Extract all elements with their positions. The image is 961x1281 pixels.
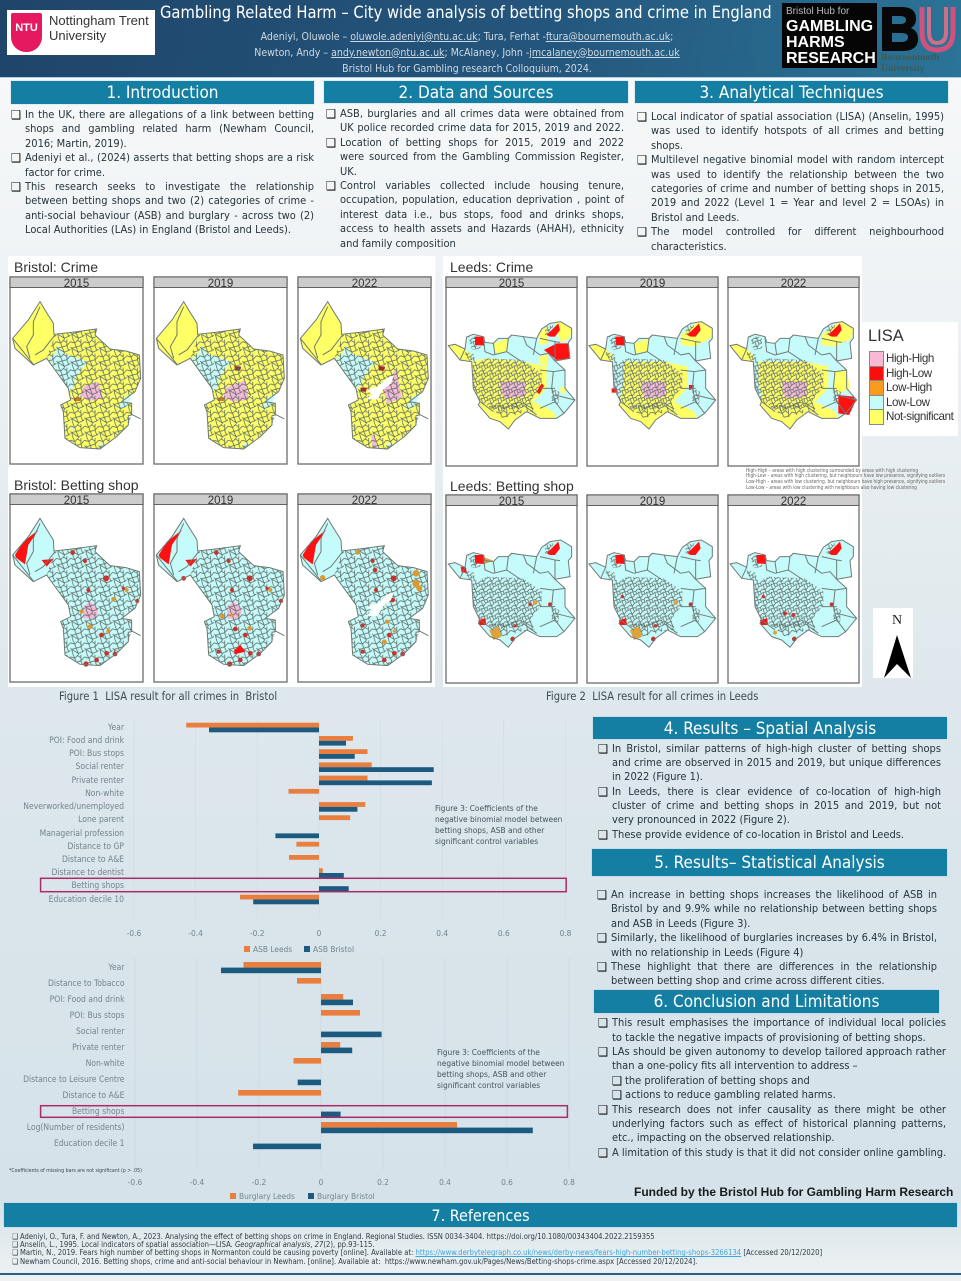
y labels: Neverworked/unemployed bbox=[23, 802, 124, 812]
legend note: LISA definitions: High-High – areas with high clustering surrounded by areas with high clustering bbox=[746, 468, 918, 474]
legend note: LISA definitions: Low-Low – areas with low clustering with neighbours also having low clustering bbox=[746, 486, 917, 491]
y labels: POI: Food and drink bbox=[49, 736, 125, 746]
y labels: Year bbox=[107, 963, 125, 973]
text: conclusion and limitations: actions to reduce gambling related harms. bbox=[625, 1088, 836, 1101]
map: Leeds crime 2015: 2015 bbox=[499, 278, 524, 290]
text: introduction bbox=[12, 108, 314, 236]
text: data and sources: occupation, population, education deprivation , point of bbox=[340, 193, 624, 206]
heading: 1. Introduction bbox=[11, 81, 314, 104]
logo: Bristol Hub for Gambling Harms Research: HARMS bbox=[786, 34, 845, 51]
text: conclusion and limitations: LAs should be given autonomy to develop tailored approach rather bbox=[612, 1045, 946, 1058]
text: references bbox=[12, 1232, 822, 1266]
bars: Burglary Bristol bbox=[221, 968, 533, 1149]
logo: Bristol Hub for Gambling Harms Research bbox=[782, 3, 877, 68]
y labels: Social renter bbox=[76, 762, 125, 772]
chart caption: Figure 3: Coefficients of the bbox=[437, 1047, 540, 1057]
heading: 7. References bbox=[4, 1203, 957, 1227]
x axis: -0.4 bbox=[190, 1177, 205, 1187]
map: Leeds crime 2022: 2022 bbox=[781, 278, 806, 290]
footer rule bbox=[0, 1273, 961, 1275]
x axis: 0.8 bbox=[563, 1177, 575, 1187]
text: spatial analysis: very pronounced in 2022 (Figure 2). bbox=[612, 813, 790, 826]
heading: 7. References: 7. References bbox=[431, 1206, 530, 1225]
text: spatial analysis: In Bristol, similar patterns of high-high cluster of betting shops bbox=[612, 742, 941, 754]
funding note: Funded by the Bristol Hub for Gambling Harm Research bbox=[634, 1185, 953, 1199]
y labels: POI: Food and drink bbox=[50, 995, 125, 1005]
text: introduction: factor for crime. bbox=[25, 166, 105, 179]
heading: 4. Results Spatial Analysis bbox=[593, 717, 947, 739]
y labels: Managerial profession bbox=[40, 829, 124, 839]
x axis: 0 bbox=[319, 1177, 324, 1187]
text: data and sources: were sourced from the Gambling Commission Register, bbox=[340, 150, 624, 163]
heading: 6. Conclusion and Limitations bbox=[594, 990, 939, 1013]
title: Gambling Related Harm – City wide analysis of betting shops and crime in England bbox=[160, 3, 772, 22]
x axis: -0.2 bbox=[250, 928, 264, 938]
x axis: -0.2 bbox=[252, 1177, 266, 1187]
map: Bristol crime 2019 bbox=[154, 277, 287, 464]
text: data and sources: ASB, burglaries and all crimes data were obtained from bbox=[340, 107, 624, 120]
text: ❑ bbox=[12, 1240, 18, 1249]
text: analytical techniques: The model controlled for different neighbourhood bbox=[651, 225, 944, 238]
heading: Leeds Betting shop: Leeds: Betting shop bbox=[450, 478, 574, 494]
text: introduction: This research seeks to investigate the relationship bbox=[25, 180, 314, 193]
text: conclusion and limitations: to tackle the negative impacts of provisioning of betting shops. bbox=[612, 1031, 926, 1044]
logo wordmark: University bbox=[49, 28, 106, 43]
text: statistical analysis: Bristol by and 9.9% while no relationship between betting shops bbox=[611, 902, 937, 915]
heading: 3. Analytical Techniques: 3. Analytical Techniques bbox=[699, 83, 884, 103]
icon: north arrow: N bbox=[892, 613, 902, 628]
x axis: 0.6 bbox=[501, 1177, 513, 1187]
text: conclusion and limitations: the proliferation of betting shops and bbox=[625, 1074, 810, 1087]
text: conclusion and limitations: underlying factors such as effect of historical planning patterns, bbox=[612, 1117, 946, 1130]
y labels: Distance to dentist bbox=[52, 868, 124, 878]
x axis: -0.4 bbox=[188, 928, 203, 938]
map: Leeds betting shop 2022 bbox=[728, 495, 859, 683]
logo: Bournemouth University: Bournemouth bbox=[881, 52, 939, 63]
logo: Bristol Hub for Gambling Harms Research: RESEARCH bbox=[786, 50, 876, 67]
x axis: -0.6 bbox=[127, 928, 142, 938]
logo: Bournemouth University: University bbox=[881, 62, 925, 74]
logo: Bournemouth University bbox=[881, 7, 956, 74]
map: Leeds crime 2019 bbox=[587, 277, 718, 466]
map: Bristol crime 2019: 2019 bbox=[208, 278, 233, 290]
y labels: Education decile 1 bbox=[54, 1139, 125, 1149]
heading: 6. Conclusion and Limitations: 6. Conclusion and Limitations bbox=[654, 992, 879, 1012]
y labels: Betting shops bbox=[71, 881, 124, 891]
text: statistical analysis: An increase in betting shops increases the likelihood of ASB in bbox=[611, 888, 937, 901]
text: analytical techniques: was used to identify hotspots of all crimes and betting bbox=[651, 124, 944, 137]
x axis: 0 bbox=[317, 928, 322, 938]
map: Bristol betting shop 2019: 2019 bbox=[208, 495, 233, 507]
text: statistical analysis bbox=[598, 888, 937, 987]
text: references: Anselin, L., 1995. Local indicators of spatial association—LISA. Geographical analysis, 27(2), pp.93-115. bbox=[20, 1240, 375, 1249]
x axis: 0.6 bbox=[498, 928, 510, 938]
heading: 2. Data and Sources: 2. Data and Sources bbox=[399, 83, 553, 103]
highlight: betting shops row bbox=[41, 1106, 567, 1117]
y labels: Log(Number of residents) bbox=[27, 1123, 125, 1133]
y labels: POI: Bus stops bbox=[69, 749, 124, 759]
map: Bristol crime 2015: 2015 bbox=[64, 278, 89, 290]
chart: ASB coefficients bbox=[23, 720, 572, 954]
y labels: Distance to Tobacco bbox=[48, 979, 125, 989]
heading: Leeds Crime: Leeds: Crime bbox=[450, 259, 533, 275]
caption: figure 1: Figure 1 LISA result for all crimes in Bristol bbox=[59, 690, 277, 703]
text: conclusion and limitations: etc., impacting on the observed relationship. bbox=[612, 1131, 835, 1144]
highlight: betting shops row bbox=[41, 878, 566, 892]
text: references: Adeniyi, O., Tura, F. and Newton, A., 2023. Analysing the effect of betting shops on crime in England. Regional Studies. ISSN 0034-3404. https://doi.org/10.1080/00343404.2022.2159355 bbox=[20, 1232, 655, 1241]
header banner bbox=[0, 0, 961, 78]
heading: 4. Results Spatial Analysis: 4. Results – Spatial Analysis bbox=[664, 719, 876, 739]
y labels: Non-white bbox=[86, 1059, 125, 1069]
text: statistical analysis: These highlight that there are differences in the relationship bbox=[611, 960, 937, 973]
text: spatial analysis: and crime are observed in 2015 and 2019, but unique differences bbox=[612, 756, 941, 769]
y labels: POI: Bus stops bbox=[70, 1011, 125, 1021]
text: analytical techniques bbox=[638, 110, 944, 253]
legend swatch: Low-High: Low-High bbox=[886, 381, 932, 394]
text: spatial analysis: cluster of crime and betting shops in 2015 and 2019, but not bbox=[612, 799, 941, 812]
legend note: LISA definitions: High-Low – areas with high clustering, but neighbours have low presence, signifying outliers bbox=[746, 474, 945, 479]
y labels: Lone parent bbox=[78, 815, 124, 825]
footnote: *Coefficients of missing bars are not significant (p > .05) bbox=[9, 1168, 142, 1174]
map: Leeds betting shop 2015: 2015 bbox=[499, 496, 524, 508]
text: introduction: Adeniyi et al., (2024) asserts that betting shops are a risk bbox=[25, 151, 314, 164]
bars: ASB Bristol bbox=[209, 728, 434, 904]
chart caption bbox=[435, 803, 563, 846]
legend swatch: Not-significant: Not-significant bbox=[886, 410, 953, 423]
panel backdrop: Bristol maps bbox=[8, 256, 435, 687]
legend swatch: High-High bbox=[869, 351, 934, 366]
text: data and sources: access to health assets and Hazards (AHAH), ethnicity bbox=[340, 222, 624, 235]
y labels bbox=[23, 723, 125, 905]
legend swatch: Low-Low: Low-Low bbox=[886, 396, 930, 409]
map: Leeds betting shop 2019: 2019 bbox=[640, 496, 665, 508]
text: data and sources: interest data i.e., bus stops, food and drinks shops, bbox=[340, 208, 624, 221]
logo wordmark bbox=[49, 13, 149, 43]
logo wordmark: Nottingham Trent bbox=[49, 13, 149, 28]
chart caption: negative binomial model between bbox=[437, 1058, 565, 1068]
text: introduction: between betting shops and two (2) categories of crime - bbox=[25, 194, 314, 207]
legend note: LISA definitions bbox=[746, 468, 945, 491]
map: Bristol betting shop 2022 bbox=[298, 494, 431, 682]
authors and colloquium: Bristol Hub for Gambling research Colloquium, 2024. bbox=[342, 63, 592, 75]
map: Bristol crime 2015 bbox=[10, 277, 143, 464]
bars: Burglary Leeds bbox=[238, 962, 457, 1128]
chart legend: Burglary Leeds bbox=[239, 1191, 295, 1201]
chart caption: significant control variables bbox=[435, 836, 538, 846]
map: Leeds betting shop 2015 bbox=[446, 495, 577, 683]
authors and colloquium bbox=[254, 31, 680, 75]
legend: LISA bbox=[862, 322, 958, 436]
logo: Bristol Hub for Gambling Harms Research: GAMBLING bbox=[786, 18, 873, 35]
text: analytical techniques: Local indicator of spatial association (LISA) (Anselin, 1995) bbox=[651, 110, 944, 123]
panel backdrop: Leeds maps bbox=[443, 256, 862, 687]
y labels bbox=[23, 963, 125, 1149]
text: ❑ bbox=[12, 1257, 18, 1266]
chart caption: significant control variables bbox=[437, 1080, 540, 1090]
text: conclusion and limitations: This result emphasises the importance of individual local policies bbox=[612, 1016, 946, 1029]
chart legend: ASB Bristol bbox=[313, 944, 354, 954]
y labels: Private renter bbox=[72, 1043, 125, 1053]
bars: ASB Leeds bbox=[186, 723, 372, 900]
map: Bristol betting shop 2015 bbox=[10, 494, 143, 682]
logo: Bristol Hub for Gambling Harms Research: Bristol Hub for bbox=[786, 6, 849, 17]
text: analytical techniques: 2019 and 2022 (Level 1 = Year and level 2 = LSOAs) in bbox=[651, 196, 944, 209]
heading: 5. Results Statistical Analysis: 5. Results– Statistical Analysis bbox=[654, 853, 885, 873]
y labels: Year bbox=[107, 723, 125, 733]
text: conclusion and limitations: than a one-policy fits all intervention to address – bbox=[612, 1059, 858, 1072]
x axis: 0.4 bbox=[439, 1177, 451, 1187]
y labels: Distance to A&E bbox=[62, 1091, 125, 1101]
chart caption: negative binomial model between bbox=[435, 814, 563, 824]
text: analytical techniques: Multilevel negative binomial model with random intercept bbox=[651, 153, 944, 166]
chart caption: Figure 3: Coefficients of the bbox=[435, 803, 538, 813]
heading: Bristol Betting shop: Bristol: Betting shop bbox=[14, 477, 139, 493]
map: Leeds betting shop 2022: 2022 bbox=[781, 496, 806, 508]
text: statistical analysis: between betting shop and crime across different cities. bbox=[611, 974, 885, 987]
text: ❑ bbox=[12, 1248, 18, 1257]
x axis bbox=[127, 928, 572, 938]
chart caption: betting shops, ASB and other bbox=[437, 1069, 547, 1079]
text: spatial analysis: In Leeds, there is clear evidence of co-location of high-high bbox=[612, 785, 941, 798]
map: Leeds crime 2015 bbox=[446, 277, 577, 466]
text: statistical analysis: with no relationship in Leeds (Figure 4) bbox=[611, 946, 803, 959]
x axis: 0.8 bbox=[560, 928, 572, 938]
heading: 5. Results Statistical Analysis bbox=[592, 849, 947, 876]
chart: burglary coefficients bbox=[9, 958, 575, 1201]
chart legend: ASB Leeds bbox=[253, 944, 292, 954]
map: Bristol crime 2022 bbox=[298, 277, 431, 464]
map: Leeds crime 2019: 2019 bbox=[640, 278, 665, 290]
text: ❑ bbox=[12, 1232, 18, 1241]
text: introduction: anti-social behaviour (ASB) and burglary - across two (2) bbox=[25, 209, 314, 222]
text: statistical analysis: and ASB in Leeds (Figure 3). bbox=[611, 917, 750, 930]
text: analytical techniques: shops. bbox=[651, 139, 683, 152]
text: spatial analysis bbox=[598, 742, 941, 841]
legend title: LISA bbox=[868, 327, 904, 345]
text: statistical analysis: Similarly, the likelihood of burglaries increases by 6.4% in Bristol, bbox=[611, 931, 937, 944]
chart legend: Burglary Bristol bbox=[317, 1191, 375, 1201]
x axis: 0.4 bbox=[436, 928, 448, 938]
y labels: Education decile 10 bbox=[49, 895, 124, 905]
text: analytical techniques: was used to identify the relationship between the two bbox=[651, 168, 944, 181]
text: conclusion and limitations bbox=[598, 1016, 946, 1159]
text: conclusion and limitations: A limitation of this study is that it did not consider online gambling. bbox=[612, 1146, 946, 1159]
text: analytical techniques: characteristics. bbox=[651, 240, 727, 253]
chart legend bbox=[230, 1191, 375, 1201]
text: introduction: In the UK, there are allegations of a link between betting bbox=[25, 108, 314, 121]
map: Bristol crime 2022: 2022 bbox=[352, 278, 377, 290]
text: introduction: shops and gambling related harm (Newham Council, bbox=[25, 122, 314, 135]
x axis bbox=[128, 1177, 575, 1187]
heading: 2. Data and Sources bbox=[324, 81, 628, 103]
legend note: LISA definitions: Low-High – areas with low clustering, but neighbours have high presence, signifying outliers bbox=[746, 480, 945, 485]
y labels: Private renter bbox=[72, 776, 125, 786]
text: data and sources: Control variables collected include housing tenure, bbox=[340, 179, 624, 192]
x axis: 0.2 bbox=[375, 928, 387, 938]
legend swatch: Low-High bbox=[869, 381, 932, 395]
chart legend bbox=[244, 944, 354, 954]
map: Leeds betting shop 2019 bbox=[587, 495, 718, 683]
text: introduction: 2016; Martin, 2019). bbox=[25, 137, 127, 150]
icon: north arrow bbox=[873, 608, 913, 678]
y labels: Betting shops bbox=[72, 1107, 125, 1117]
heading: 1. Introduction: 1. Introduction bbox=[106, 83, 218, 103]
text: references: Newham Council, 2016. Betting shops, crime and anti-social behaviour in Newham. [online]. Available at: https://www.newham.gov.uk/Pages/News/Betting-shops-crime.aspx [Accessed 20/12/2024]. bbox=[20, 1257, 697, 1266]
authors and colloquium: Newton, Andy – andy.newton@ntu.ac.uk; McAlaney, John -jmcalaney@bournemouth.ac.uk bbox=[254, 47, 680, 59]
y labels: Distance to GP bbox=[67, 842, 124, 852]
text: references: Martin, N., 2019. Fears high number of betting shops in Normanton could be causing poverty [online]. Available at: https://www.derbytelegraph.co.uk/news/derby-news/fears-high-number-betting-shops-3266134 [Accessed 20/12/2020] bbox=[20, 1248, 822, 1257]
x axis: -0.6 bbox=[128, 1177, 143, 1187]
heading: Bristol Crime: Bristol: Crime bbox=[14, 259, 98, 275]
chart caption bbox=[437, 1047, 565, 1090]
map: Bristol betting shop 2022: 2022 bbox=[352, 495, 377, 507]
text: data and sources: UK police recorded crime data for 2015, 2019 and 2022. bbox=[340, 121, 624, 134]
text: data and sources bbox=[326, 107, 624, 250]
caption: figure 2: Figure 2 LISA result for all crimes in Leeds bbox=[546, 690, 758, 703]
legend swatch: High-Low: High-Low bbox=[886, 367, 932, 380]
y labels: Distance to A&E bbox=[62, 855, 124, 865]
legend swatch: High-High: High-High bbox=[886, 352, 934, 365]
legend swatch: High-Low bbox=[869, 367, 932, 380]
x axis: 0.2 bbox=[377, 1177, 389, 1187]
icon: NTU shield bbox=[11, 13, 42, 52]
text: analytical techniques: categories of crime and number of betting shops in 2015, bbox=[651, 182, 944, 195]
text: conclusion and limitations: This research does not infer causality as there might be other bbox=[612, 1103, 946, 1116]
icon: NTU shield: NTU bbox=[15, 22, 38, 34]
y labels: Social renter bbox=[76, 1027, 125, 1037]
text: analytical techniques: Bristol and Leeds. bbox=[651, 211, 739, 224]
map: Bristol betting shop 2015: 2015 bbox=[64, 495, 89, 507]
map: Leeds crime 2022 bbox=[728, 277, 859, 466]
text: spatial analysis: in 2022 (Figure 1). bbox=[612, 770, 703, 783]
authors and colloquium: Adeniyi, Oluwole – oluwole.adeniyi@ntu.ac.uk; Tura, Ferhat -ftura@bournemouth.ac.uk; bbox=[261, 31, 673, 43]
text: data and sources: and family composition bbox=[340, 237, 456, 250]
text: introduction: Local Authorities (LAs) in England (Bristol and Leeds). bbox=[25, 223, 291, 236]
text: data and sources: UK. bbox=[340, 165, 357, 178]
logo: Nottingham Trent University bbox=[7, 10, 155, 55]
text: data and sources: Location of betting shops for 2015, 2019 and 2022 bbox=[340, 136, 624, 149]
y labels: Non-white bbox=[85, 789, 124, 799]
y labels: Distance to Leisure Centre bbox=[23, 1075, 125, 1085]
chart caption: betting shops, ASB and other bbox=[435, 825, 545, 835]
text: spatial analysis: These provide evidence of co-location in Bristol and Leeds. bbox=[612, 828, 904, 841]
map: Bristol betting shop 2019 bbox=[154, 494, 287, 682]
heading: 3. Analytical Techniques bbox=[635, 81, 948, 103]
legend swatch: Not-significant bbox=[869, 410, 954, 425]
